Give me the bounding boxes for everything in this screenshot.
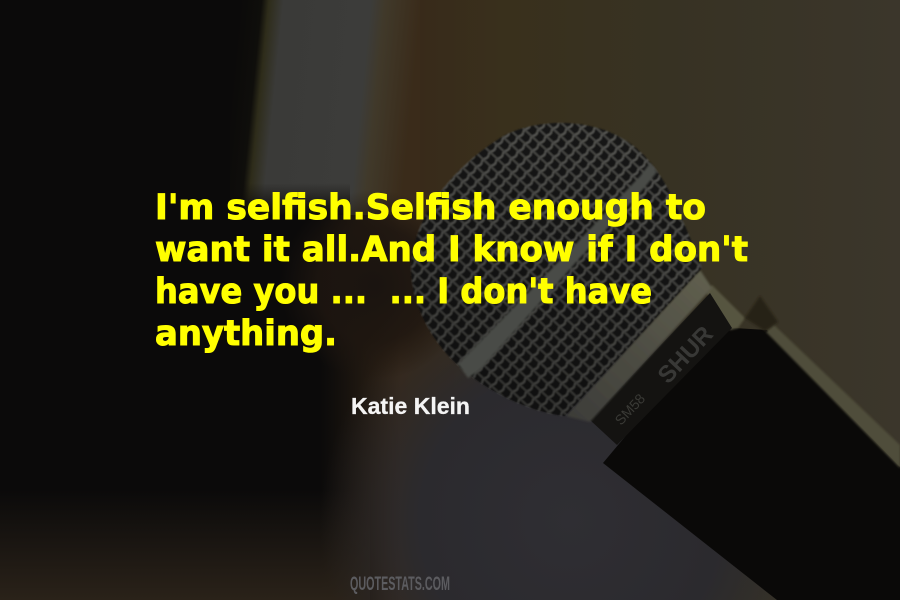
- microphone body: [603, 327, 900, 600]
- quote text: anything.: [155, 314, 337, 354]
- quote text: [155, 188, 748, 354]
- microphone grille: [411, 123, 702, 416]
- microphone model: SM58: [611, 390, 648, 428]
- icon: microphone: [411, 123, 900, 600]
- quote text: want it all.And I know if I don't: [155, 230, 748, 270]
- microphone neck ring: [590, 293, 732, 445]
- quote text: have you ... ... I don't have: [155, 272, 652, 312]
- quote text: I'm selfish.Selfish enough to: [155, 188, 706, 228]
- microphone collar: [566, 270, 712, 422]
- microphone grille band: [458, 163, 657, 378]
- watermark: QUOTESTATS.COM: [350, 574, 450, 595]
- author name: Katie Klein: [351, 393, 470, 419]
- microphone side clip: [766, 325, 900, 468]
- blurred pale strip: [230, 0, 420, 215]
- microphone brand: SHUR: [653, 321, 719, 389]
